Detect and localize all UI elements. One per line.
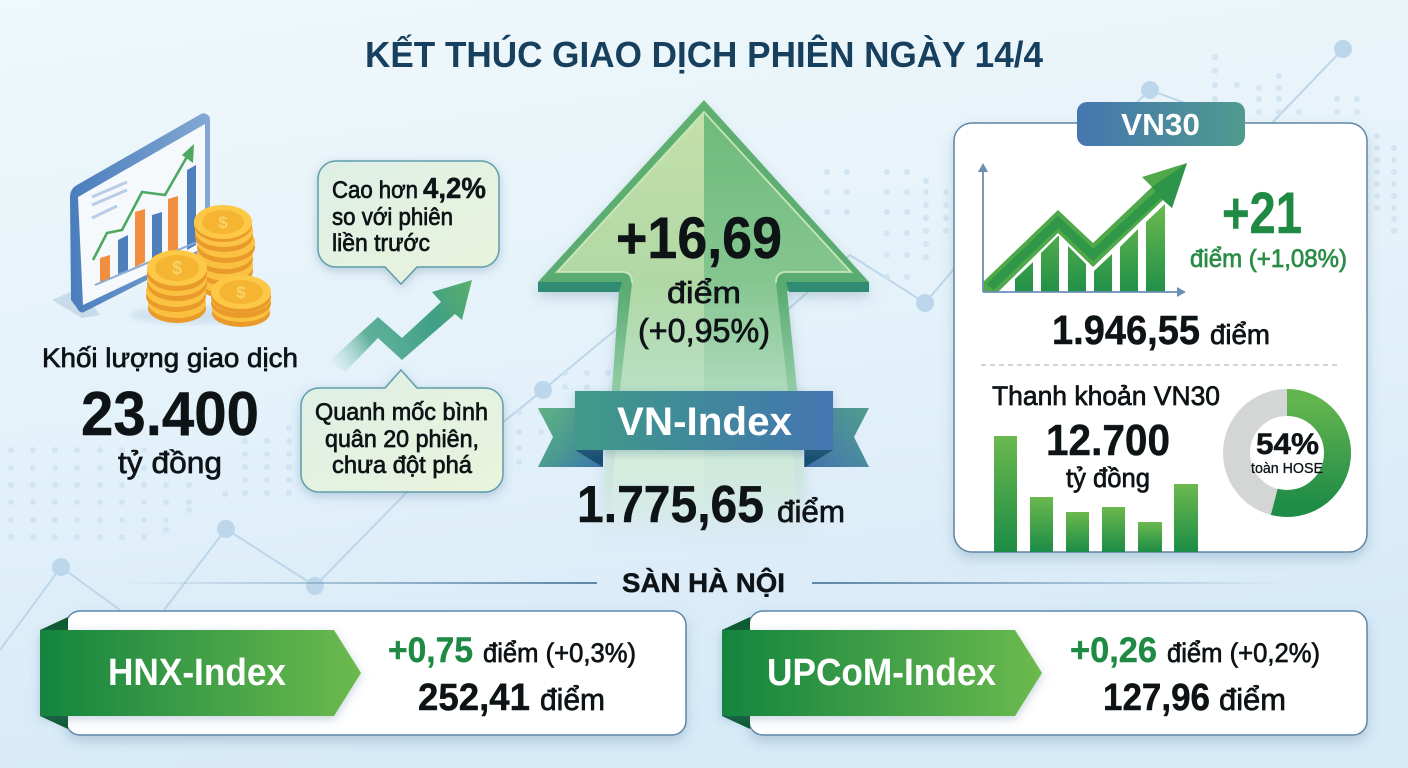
callout: around 20 session average: chưa đột phá [332, 452, 473, 479]
icon: back coin stack [194, 205, 255, 298]
liquidity value: 12.700 [1046, 416, 1170, 465]
gain value: +16,69 [616, 206, 782, 271]
banner ribbon: VN-Index [617, 400, 792, 444]
VN30 gain: +21 [1222, 181, 1302, 246]
icon: left coin stack: $ [172, 258, 182, 278]
ribbon: HNX-Index: HNX-Index [108, 652, 286, 694]
panel: VN30 [954, 102, 1367, 552]
callout: higher than previous session: 4,2% [423, 173, 486, 205]
gain percent: (+0,95%) [638, 312, 770, 349]
background chart lines and dots [0, 40, 1397, 650]
index value: 1.775,65 [577, 476, 764, 534]
UPCoM change [1070, 631, 1320, 670]
arrow: zigzag trend [328, 280, 472, 372]
callout: around 20 session average: Quanh mốc bình [315, 399, 488, 426]
icon: monitor chart with coins [52, 113, 271, 327]
volume value: 23.400 [81, 380, 259, 449]
chart: donut 54 percent: toàn HOSE [1251, 460, 1323, 477]
HNX change: +0,75 [388, 631, 473, 670]
title: KẾT THÚC GIAO DỊCH PHIÊN NGÀY 14/4 [365, 33, 1043, 75]
panel: HNX-Index [40, 611, 686, 735]
ribbon: UPCoM-Index [722, 617, 1042, 729]
callout: around 20 session average: quân 20 phiên, [325, 426, 479, 453]
chart: donut 54 percent: 54% [1256, 428, 1319, 461]
callout: around 20 session average [301, 370, 503, 492]
index unit: điểm [777, 494, 845, 529]
VN30 tab: VN30 [1121, 107, 1200, 142]
HNX value [418, 677, 605, 719]
HNX value: 252,41 [418, 677, 530, 719]
gain unit: điểm [667, 275, 741, 310]
ribbon: UPCoM-Index: UPCoM-Index [767, 652, 996, 694]
volume unit: tỷ đồng [118, 445, 222, 480]
icon: back coin stack: $ [218, 213, 228, 232]
VN30 index unit: điểm [1210, 319, 1270, 350]
panel: VN-Index [538, 100, 869, 540]
chart: donut 54 percent [1236, 402, 1338, 504]
big up arrow [538, 100, 869, 540]
HNX change [388, 631, 636, 670]
banner ribbon [538, 391, 869, 467]
UPCoM change: +0,26 [1070, 631, 1157, 670]
chart: VN30 trend [978, 163, 1187, 297]
VN30 tab [1077, 102, 1245, 146]
UPCoM value: điểm [1219, 682, 1286, 717]
chart: liquidity bars [994, 436, 1198, 552]
icon: left coin stack [146, 250, 207, 323]
UPCoM value [1103, 677, 1286, 719]
icon: right coin stack: $ [236, 283, 246, 302]
UPCoM value: 127,96 [1103, 677, 1210, 719]
panel: trading volume [42, 113, 298, 480]
ribbon: HNX-Index [40, 617, 361, 729]
UPCoM change: điểm (+0,2%) [1167, 638, 1320, 668]
callout: higher than previous session: liền trước [332, 230, 430, 257]
section heading: Hanoi exchange: SÀN HÀ NỘI [622, 567, 785, 598]
callout: higher than previous session: Cao hơn [332, 177, 418, 204]
liquidity unit: tỷ đồng [1066, 463, 1150, 493]
HNX change: điểm (+0,3%) [483, 638, 636, 668]
icon: right coin stack [211, 275, 271, 327]
HNX value: điểm [540, 682, 605, 717]
VN30 index value: 1.946,55 [1052, 307, 1200, 353]
liquidity label: Thanh khoản VN30 [992, 381, 1220, 411]
volume label: Khối lượng giao dịch [42, 343, 298, 373]
callout: higher than previous session: so với phiên [332, 204, 453, 231]
callout: higher than previous session [318, 161, 499, 284]
panel: UPCoM-Index [722, 611, 1367, 735]
VN30 gain percent: điểm (+1,08%) [1190, 245, 1347, 273]
